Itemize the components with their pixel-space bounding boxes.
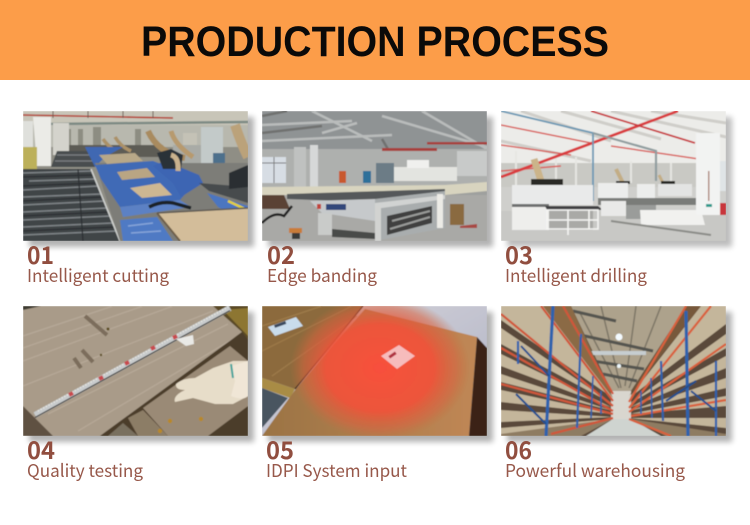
label: Intelligent cutting <box>27 263 169 288</box>
label: IDPI System input <box>266 458 407 483</box>
photo: CNC cutting line <box>23 111 248 241</box>
panel: step 05 IDPI system input <box>262 296 493 483</box>
number 04: 04 <box>27 431 55 466</box>
photo: edge banding machine <box>262 111 487 241</box>
title: PRODUCTION PROCESS <box>141 18 609 66</box>
panel: step 02 edge banding <box>262 111 493 288</box>
title banner <box>0 0 750 80</box>
number 01: 01 <box>27 236 54 271</box>
panel: step 01 intelligent cutting <box>23 111 254 288</box>
label: Intelligent drilling <box>505 263 647 288</box>
number 03: 03 <box>505 236 533 271</box>
photo: red laser scan on wood <box>262 296 487 440</box>
panel: step 04 quality testing <box>23 306 254 483</box>
photo: warehouse racks <box>501 306 726 436</box>
photo: drilling machines <box>501 111 726 241</box>
label: Edge banding <box>267 263 377 288</box>
label: Quality testing <box>27 458 143 483</box>
panel: step 03 intelligent drilling <box>501 111 732 288</box>
number 05: 05 <box>266 431 294 466</box>
photo: measuring a panel <box>23 306 248 436</box>
label: Powerful warehousing <box>505 458 685 483</box>
panel: step 06 powerful warehousing <box>501 306 732 483</box>
number 06: 06 <box>505 431 532 466</box>
number 02: 02 <box>267 236 295 271</box>
